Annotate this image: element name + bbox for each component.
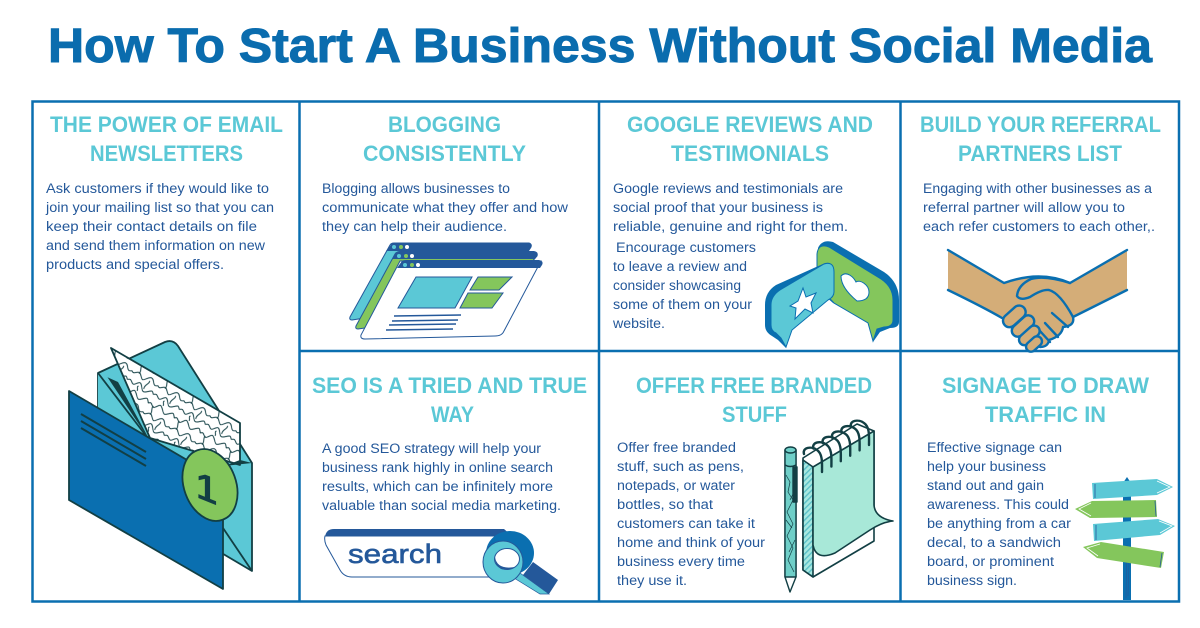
heading: free branded stuff: OFFER FREE BRANDED	[636, 373, 872, 398]
text: free branded stuff	[617, 440, 766, 588]
heading: email newsletters: THE POWER OF EMAIL	[50, 112, 283, 137]
text: free branded stuff: bottles, so that	[617, 497, 713, 512]
text: referral partners: referral partner will allow you to	[923, 200, 1125, 215]
text: google reviews: some of them on your	[613, 297, 753, 312]
panel: referral partners	[920, 112, 1161, 354]
text: email newsletters: Ask customers if they would like to	[46, 181, 269, 196]
text: referral partners	[923, 181, 1155, 234]
text: email newsletters	[45, 181, 274, 272]
heading: email newsletters: NEWSLETTERS	[90, 141, 243, 166]
icon: notepad	[803, 421, 893, 577]
heading: referral partners	[920, 112, 1161, 166]
icon: pen	[785, 447, 797, 592]
text: blogging: they can help their audience.	[322, 219, 507, 234]
text: signage: be anything from a car	[927, 516, 1072, 531]
text: SEO: business rank highly in online search	[322, 460, 553, 475]
text: google reviews: social proof that your business is	[613, 200, 823, 215]
text: blogging: communicate what they offer and how	[322, 200, 568, 215]
title: How To Start A Business Without Social Media	[48, 20, 1152, 73]
icon: search bar	[325, 529, 558, 594]
text: blogging	[322, 181, 568, 234]
text: SEO: results, which can be infinitely more	[322, 479, 553, 494]
text: signage: help your business	[927, 459, 1046, 474]
heading: SEO: SEO IS A TRIED AND TRUE	[312, 373, 587, 398]
text: signage: Effective signage can	[927, 440, 1062, 455]
text: email newsletters: and send them information on new	[46, 238, 265, 253]
text: google reviews: consider showcasing	[613, 278, 741, 293]
icon: browser windows	[350, 243, 543, 339]
heading: blogging	[363, 112, 526, 166]
text: signage: business sign.	[927, 573, 1017, 588]
heading: google reviews: TESTIMONIALS	[671, 141, 829, 166]
text: free branded stuff: they use it.	[617, 573, 687, 588]
text: email newsletters: join your mailing list so that you can	[45, 200, 274, 215]
badge number: 1	[196, 463, 217, 514]
heading: email newsletters	[50, 112, 283, 166]
icon: speech bubbles	[765, 241, 899, 348]
text: signage	[927, 440, 1072, 588]
icon: signpost	[1075, 477, 1175, 600]
grid frame	[32, 101, 1179, 602]
text: google reviews: to leave a review and	[613, 259, 747, 274]
heading: SEO: WAY	[431, 402, 474, 427]
icon: handshake	[948, 250, 1127, 354]
panel: blogging	[322, 112, 568, 339]
text: signage: awareness. This could	[927, 497, 1069, 512]
text: google reviews: Google reviews and testimonials are	[613, 181, 843, 196]
text: email newsletters: products and special offers.	[46, 257, 224, 272]
panel: signage	[927, 373, 1175, 600]
text: free branded stuff: Offer free branded	[617, 440, 736, 455]
heading: blogging: CONSISTENTLY	[363, 141, 526, 166]
text: signage: decal, to a sandwich	[927, 535, 1061, 550]
heading: signage: TRAFFIC IN	[985, 402, 1106, 427]
heading: free branded stuff: STUFF	[722, 402, 787, 427]
text: referral partners: Engaging with other businesses as a	[923, 181, 1153, 196]
text: free branded stuff: business every time	[617, 554, 745, 569]
text: free branded stuff: customers can take it	[617, 516, 755, 531]
heading: referral partners: BUILD YOUR REFERRAL	[920, 112, 1161, 137]
text: blogging: Blogging allows businesses to	[322, 181, 510, 196]
search word: search	[348, 539, 442, 569]
icon: envelope	[69, 341, 252, 589]
text: email newsletters: keep their contact details on file	[46, 219, 257, 234]
text: google reviews: Encourage customers	[616, 240, 756, 255]
text: SEO	[322, 441, 561, 513]
text: google reviews: reliable, genuine and right for them.	[613, 219, 848, 234]
text: free branded stuff: stuff, such as pens,	[617, 459, 744, 474]
text: referral partners: each refer customers to each other,.	[923, 219, 1155, 234]
heading: google reviews	[627, 112, 873, 166]
heading: signage: SIGNAGE TO DRAW	[942, 373, 1149, 398]
text: SEO: A good SEO strategy will help your	[322, 441, 542, 456]
heading: free branded stuff	[636, 373, 872, 427]
text: google reviews	[612, 181, 848, 331]
text: free branded stuff: home and think of your	[617, 535, 766, 550]
heading: SEO	[312, 373, 587, 427]
heading: signage	[942, 373, 1149, 427]
panel: email newsletters	[45, 112, 283, 589]
panel: google reviews	[612, 112, 899, 348]
heading: blogging: BLOGGING	[388, 112, 501, 137]
panel: free branded stuff	[617, 373, 893, 592]
heading: google reviews: GOOGLE REVIEWS AND	[627, 112, 873, 137]
text: google reviews: website.	[612, 316, 665, 331]
panel: SEO	[312, 373, 587, 594]
text: signage: board, or prominent	[927, 554, 1054, 569]
heading: referral partners: PARTNERS LIST	[958, 141, 1123, 166]
text: SEO: valuable than social media marketing.	[322, 498, 561, 513]
text: signage: stand out and gain	[927, 478, 1044, 493]
text: free branded stuff: notepads, or water	[617, 478, 736, 493]
